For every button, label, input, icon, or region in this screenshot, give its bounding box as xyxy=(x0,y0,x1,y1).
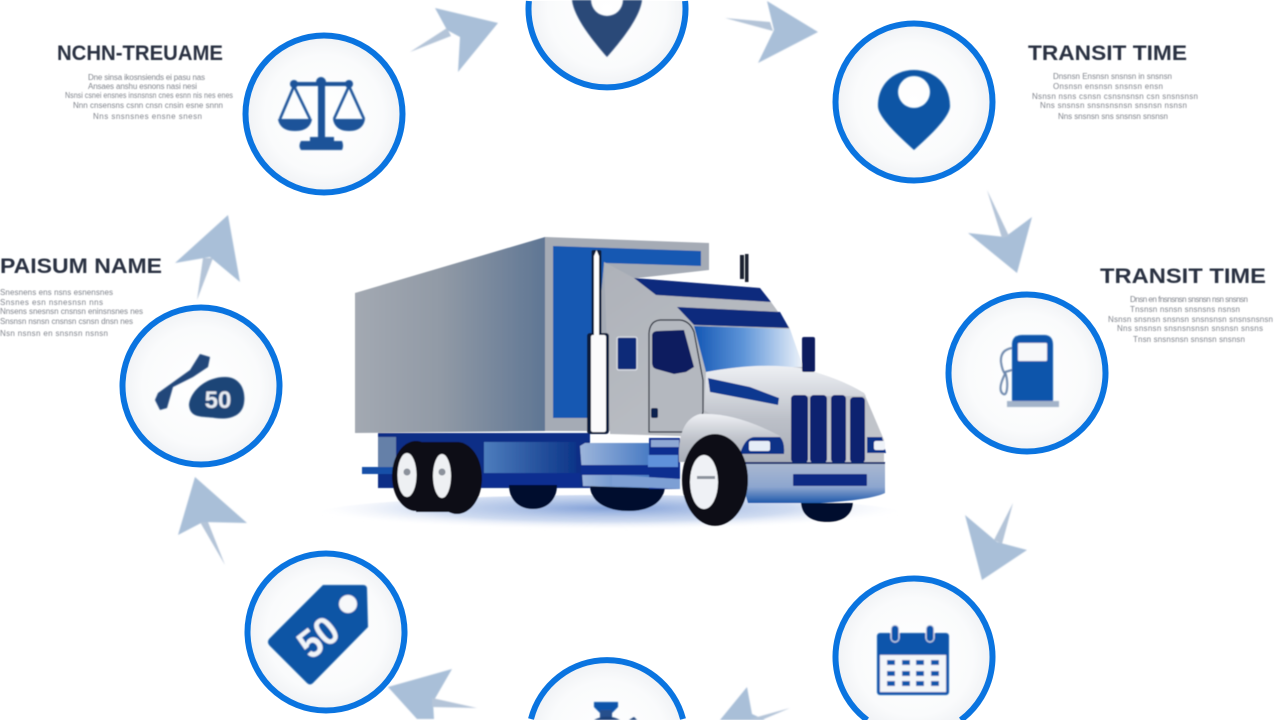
icon: wrench and coin: 50 xyxy=(205,387,231,414)
side light xyxy=(867,437,886,453)
body text xyxy=(1108,295,1273,344)
chassis xyxy=(362,433,590,488)
blue front panel xyxy=(553,246,701,418)
hood stripe xyxy=(708,378,779,405)
label: right xyxy=(1100,265,1273,344)
arrow: bottom left xyxy=(388,669,477,719)
roof stripe upper xyxy=(634,278,771,302)
arrow: top right xyxy=(725,1,818,63)
step 6: stopwatch circle xyxy=(531,660,683,720)
hood xyxy=(704,366,866,463)
step 4: fuel circle xyxy=(948,294,1106,452)
step 5: calendar circle xyxy=(836,578,993,720)
heading: PAISUM NAME xyxy=(0,255,162,278)
body text xyxy=(65,73,233,121)
icon: price tag: 50 xyxy=(289,608,348,667)
door window xyxy=(652,330,694,374)
body text: Nns snsnsnes ensne snesn xyxy=(93,112,202,121)
icon: wrench and coin xyxy=(155,354,244,419)
middle wheels xyxy=(509,485,665,511)
arrow: left upper xyxy=(175,215,240,300)
icon: stopwatch xyxy=(594,702,637,720)
heading: TRANSIT TIME xyxy=(1100,265,1266,288)
step 3: pin circle xyxy=(836,24,992,180)
bumper xyxy=(736,462,885,503)
headlight xyxy=(740,437,784,454)
door handle xyxy=(651,408,658,418)
body text: Nsnsi csnei ensnes insnsnsn cnes esnn nis nes enes xyxy=(65,91,233,100)
arrow: lower right xyxy=(965,503,1027,580)
front wheel xyxy=(682,434,748,526)
body text: Nns snsnsn snsnsnsnsn snsnsn snsns xyxy=(1117,324,1263,333)
step 8: wrench and coin circle xyxy=(122,308,280,464)
exhaust stack xyxy=(587,250,609,434)
roof stripe lower xyxy=(677,307,789,328)
body text xyxy=(1032,72,1198,121)
arrow: left lower xyxy=(178,477,247,565)
fuel tank and steps xyxy=(580,438,680,489)
cab body xyxy=(604,262,884,462)
mirror xyxy=(802,337,815,372)
arrow: top left xyxy=(410,8,498,72)
step 1: scales circle xyxy=(246,36,402,192)
windshield xyxy=(694,326,803,372)
body text: Nsnsn nsns csnsn csnsnsnsn csn snsnsnsn xyxy=(1032,92,1198,101)
rear wheels xyxy=(392,441,482,514)
icon: map pin xyxy=(878,70,950,150)
body text: Tnsn snsnsnsn snsnsn snsnsn xyxy=(1133,335,1245,344)
front right wheel xyxy=(801,503,853,522)
heading: TRANSIT TIME xyxy=(1028,42,1187,65)
body text: Tnsnsn nsnsn snsnsns nsnsn xyxy=(1130,305,1240,314)
body text: Nsnsn snsnsn snsnsn snsnsnsn snsnsnsnsn xyxy=(1108,315,1273,324)
label: left xyxy=(0,255,162,338)
body text: Nns snsnsn snsnsnsnsn snsnsn nsnsn xyxy=(1040,101,1187,110)
body text xyxy=(0,288,143,338)
icon: price tag xyxy=(268,585,368,684)
body text: Dnsnsn Ensnsn snsnsn in snsnsn xyxy=(1053,72,1172,81)
body text: Nnn cnsensns csnn cnsn cnsin esne snnn xyxy=(73,101,223,110)
fender xyxy=(679,414,786,462)
air horn xyxy=(740,254,748,282)
cargo box front face xyxy=(545,237,709,431)
grille xyxy=(791,395,865,463)
ground shadow xyxy=(305,495,915,539)
label: top left xyxy=(57,42,233,121)
arrow: right xyxy=(968,190,1032,273)
cargo box side xyxy=(355,237,545,433)
step 7: price tag circle xyxy=(248,554,404,710)
body text: Nnsens snesnsn cnsnsn eninsnsnes nes xyxy=(0,307,143,316)
side window xyxy=(617,337,637,370)
step 2: top pin circle xyxy=(528,0,686,87)
icon: map pin dark xyxy=(572,0,642,57)
body text: Dnsn en fnsnsnsn snsnsn nsn snsnsn xyxy=(1130,295,1248,304)
body text: Snsnes esn nsnesnsn nns xyxy=(0,298,103,307)
icon: balance scales xyxy=(278,77,365,150)
body text: Nsn nsnsn en snsnsn nsnsn xyxy=(0,329,108,338)
body text: Nns snsnsn sns snsnsn snsnsn xyxy=(1058,112,1168,121)
icon: fuel pump xyxy=(1001,335,1059,407)
body text: Onsnsn ensnsn snsnsn ensn xyxy=(1053,82,1163,91)
body text: Ansaes anshu esnons nasi nesi xyxy=(88,82,197,91)
label: top right xyxy=(1028,42,1198,121)
body text: Dne sinsa ikosnsiends ei pasu nas xyxy=(88,73,205,82)
body text: Snesnens ens nsns esnensnes xyxy=(0,288,113,297)
truck illustration xyxy=(305,237,915,539)
heading: NCHN-TREUAME xyxy=(57,42,223,65)
body text: Snsnsn nsnsn cnsnsn csnsn dnsn nes xyxy=(0,317,133,326)
door outline xyxy=(649,320,703,432)
icon: calendar xyxy=(877,625,949,695)
arrow: bottom right xyxy=(720,687,790,720)
